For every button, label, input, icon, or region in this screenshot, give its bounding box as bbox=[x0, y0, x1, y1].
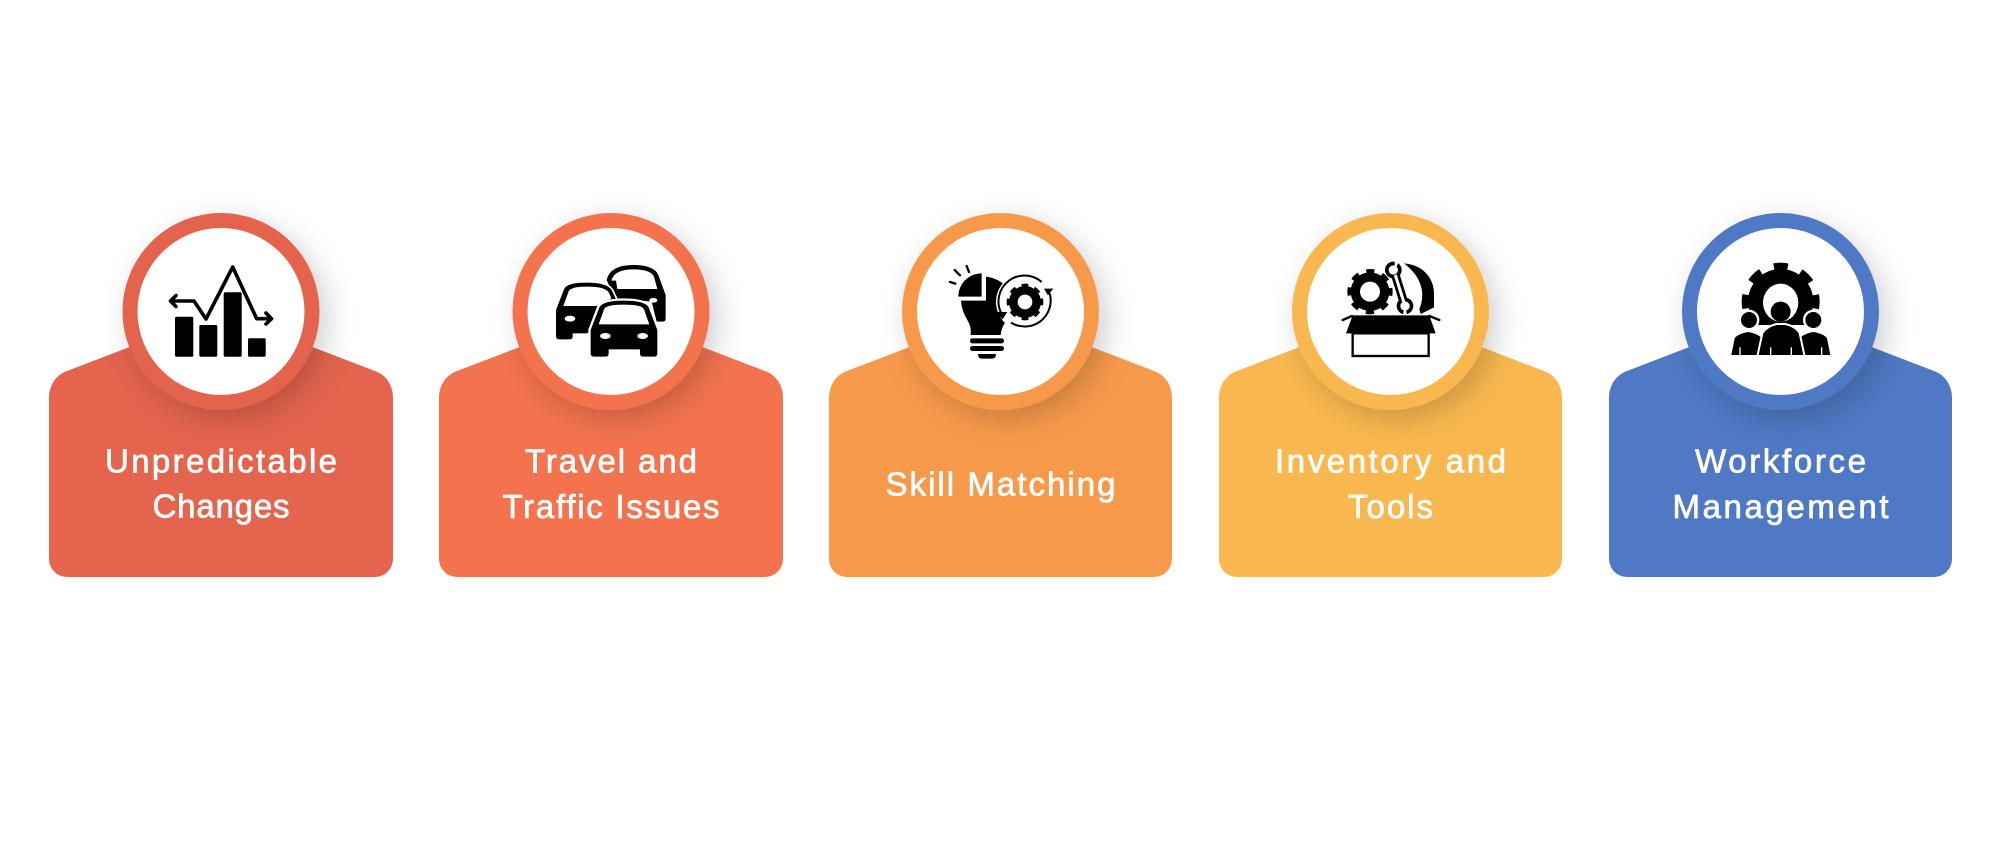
label: Inventory and bbox=[1275, 443, 1506, 480]
icon ring bbox=[1300, 220, 1482, 402]
label: Traffic Issues bbox=[502, 488, 720, 525]
label: Skill Matching bbox=[886, 466, 1116, 503]
panel: Unpredictable Changes bbox=[49, 220, 393, 577]
panel: Travel and Traffic Issues bbox=[439, 220, 783, 577]
label: Changes bbox=[152, 488, 290, 524]
label bbox=[502, 443, 720, 525]
card shape bbox=[829, 312, 1172, 577]
icon: traffic of cars bbox=[556, 265, 666, 357]
icon: team with gear bbox=[1731, 266, 1830, 355]
icon: light bulb with gear bbox=[950, 266, 1054, 359]
icon ring bbox=[130, 220, 312, 402]
label: Management bbox=[1672, 488, 1888, 525]
card shape bbox=[439, 312, 783, 577]
label: Travel and bbox=[525, 443, 697, 480]
card shape bbox=[1219, 312, 1562, 577]
label: Unpredictable bbox=[105, 443, 337, 480]
panel: Inventory and Tools bbox=[1219, 220, 1562, 577]
icon ring bbox=[520, 220, 702, 402]
panel: Skill Matching bbox=[829, 220, 1172, 577]
card shape bbox=[49, 312, 393, 577]
label bbox=[1672, 443, 1888, 525]
label: Workforce bbox=[1695, 443, 1866, 480]
label: Tools bbox=[1348, 488, 1433, 525]
card shape bbox=[1609, 312, 1952, 577]
label bbox=[105, 443, 337, 524]
panel: Workforce Management bbox=[1609, 220, 1952, 577]
label bbox=[1275, 443, 1506, 525]
icon ring bbox=[910, 220, 1092, 402]
icon: box with gear and tools bbox=[1343, 261, 1439, 356]
icon: bar chart with trend arrow bbox=[170, 267, 272, 357]
icon ring bbox=[1690, 220, 1872, 402]
